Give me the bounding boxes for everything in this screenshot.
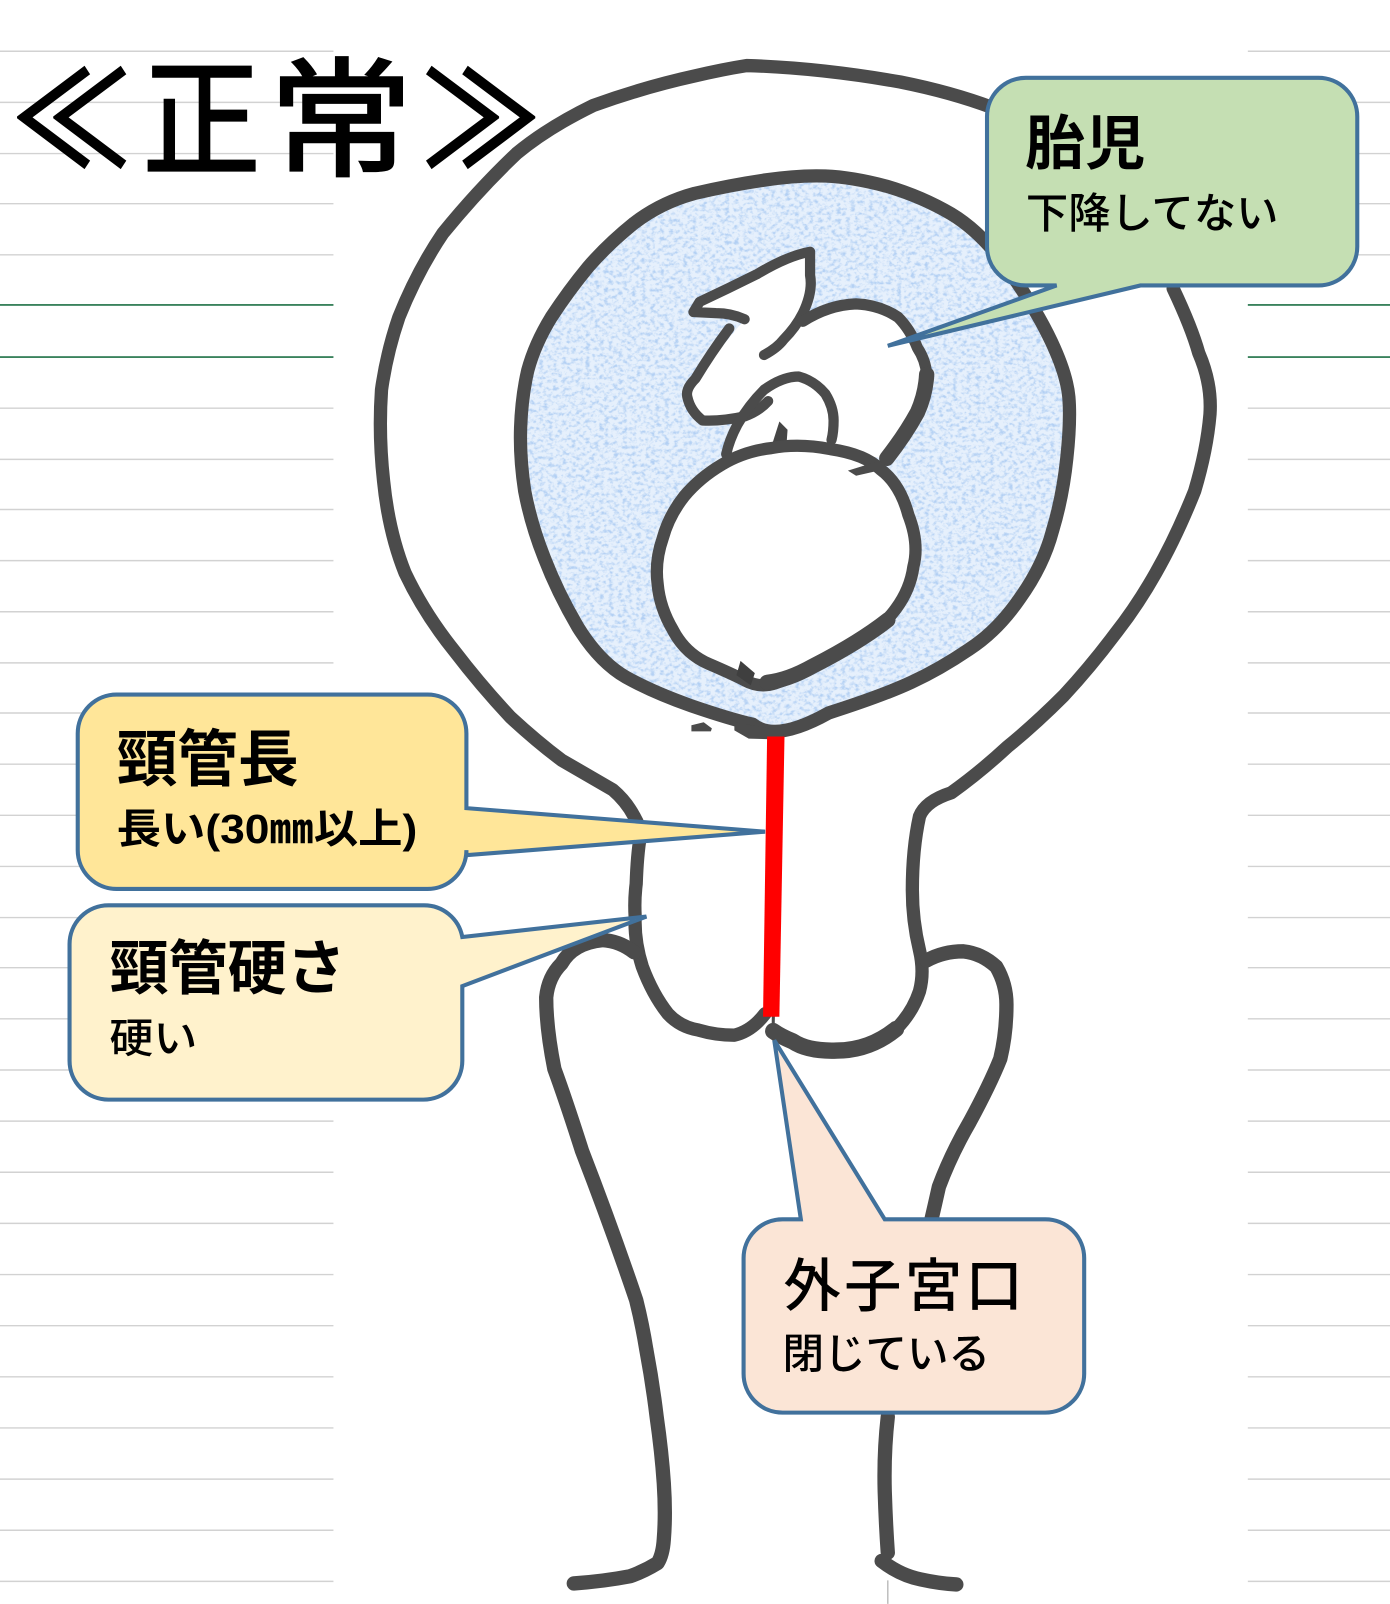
heading: fetus: 胎児 — [1025, 110, 1146, 177]
text: long: 長い(30㎜以上) — [117, 806, 417, 852]
callout: cervical length — [78, 695, 765, 889]
callout: cervical firmness — [70, 905, 646, 1100]
title: 正 — [143, 50, 260, 194]
text: not descended: 下降してない — [1026, 190, 1279, 237]
title: ≪ — [12, 51, 131, 194]
left thigh and leg outline — [546, 940, 665, 1583]
fetus body — [687, 252, 929, 458]
title: 常 — [269, 49, 413, 193]
heading: external os: 外子宮口 — [783, 1255, 1023, 1319]
heading: cervical length: 頸管長 — [117, 726, 299, 795]
title: ≫ — [421, 51, 541, 194]
text: firm: 硬い — [109, 1016, 197, 1062]
uterus and cervix outline — [380, 66, 1210, 1051]
title — [12, 49, 541, 194]
fetal head — [657, 446, 916, 685]
text: closed: 閉じている — [782, 1331, 990, 1378]
right thigh and leg outline — [882, 951, 1006, 1584]
heading: cervical firmness: 頸管硬さ — [109, 935, 346, 1002]
cervical length red line — [763, 737, 784, 1017]
callout: fetus — [888, 78, 1357, 346]
callout: external os — [744, 1040, 1084, 1413]
amniotic sac — [520, 176, 1070, 740]
